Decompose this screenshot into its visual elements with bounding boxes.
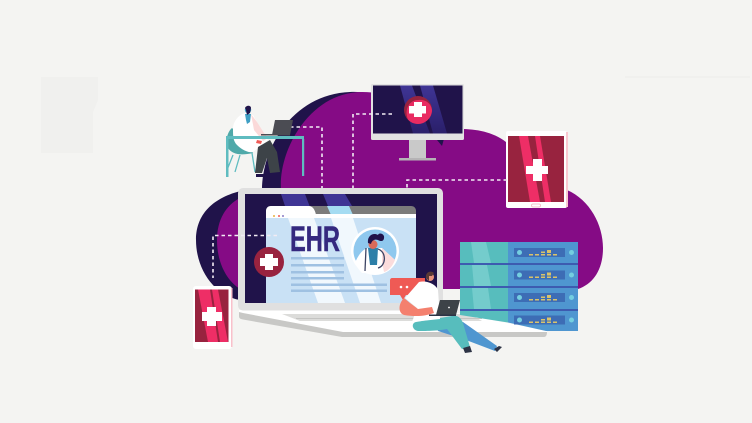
server rack xyxy=(460,242,578,331)
browser window xyxy=(266,206,416,303)
red cross badge xyxy=(254,247,284,277)
faint background watermark xyxy=(41,76,750,153)
dashed connection lines xyxy=(290,114,507,212)
laptop xyxy=(238,188,547,337)
chair xyxy=(227,128,253,154)
desk laptop xyxy=(272,120,293,135)
light beams xyxy=(288,218,345,303)
server unit 4 xyxy=(514,316,574,324)
cloud background xyxy=(196,92,603,300)
tablet with medical cross xyxy=(506,131,568,208)
blue leg xyxy=(435,322,497,351)
coat xyxy=(233,113,268,152)
server unit 1 xyxy=(514,248,574,257)
person sitting with laptop xyxy=(390,272,502,353)
sleeve xyxy=(400,298,434,316)
chat bubble xyxy=(390,278,425,300)
server unit 2 xyxy=(514,270,574,280)
doctor portrait xyxy=(351,227,399,275)
server unit 3 xyxy=(514,293,574,302)
record text lines xyxy=(291,257,387,292)
phone with medical cross xyxy=(193,286,232,349)
desk xyxy=(226,136,304,139)
laptop base xyxy=(239,310,547,333)
laptop screen xyxy=(245,194,437,303)
trousers xyxy=(255,140,280,173)
teal leg xyxy=(413,316,470,349)
monitor with medical cross xyxy=(371,84,464,160)
torso xyxy=(405,281,440,322)
laptop frame xyxy=(238,188,443,310)
left dashed line xyxy=(213,236,277,278)
EHR heading: EHR xyxy=(290,220,340,259)
doctor at desk with laptop xyxy=(226,106,304,177)
